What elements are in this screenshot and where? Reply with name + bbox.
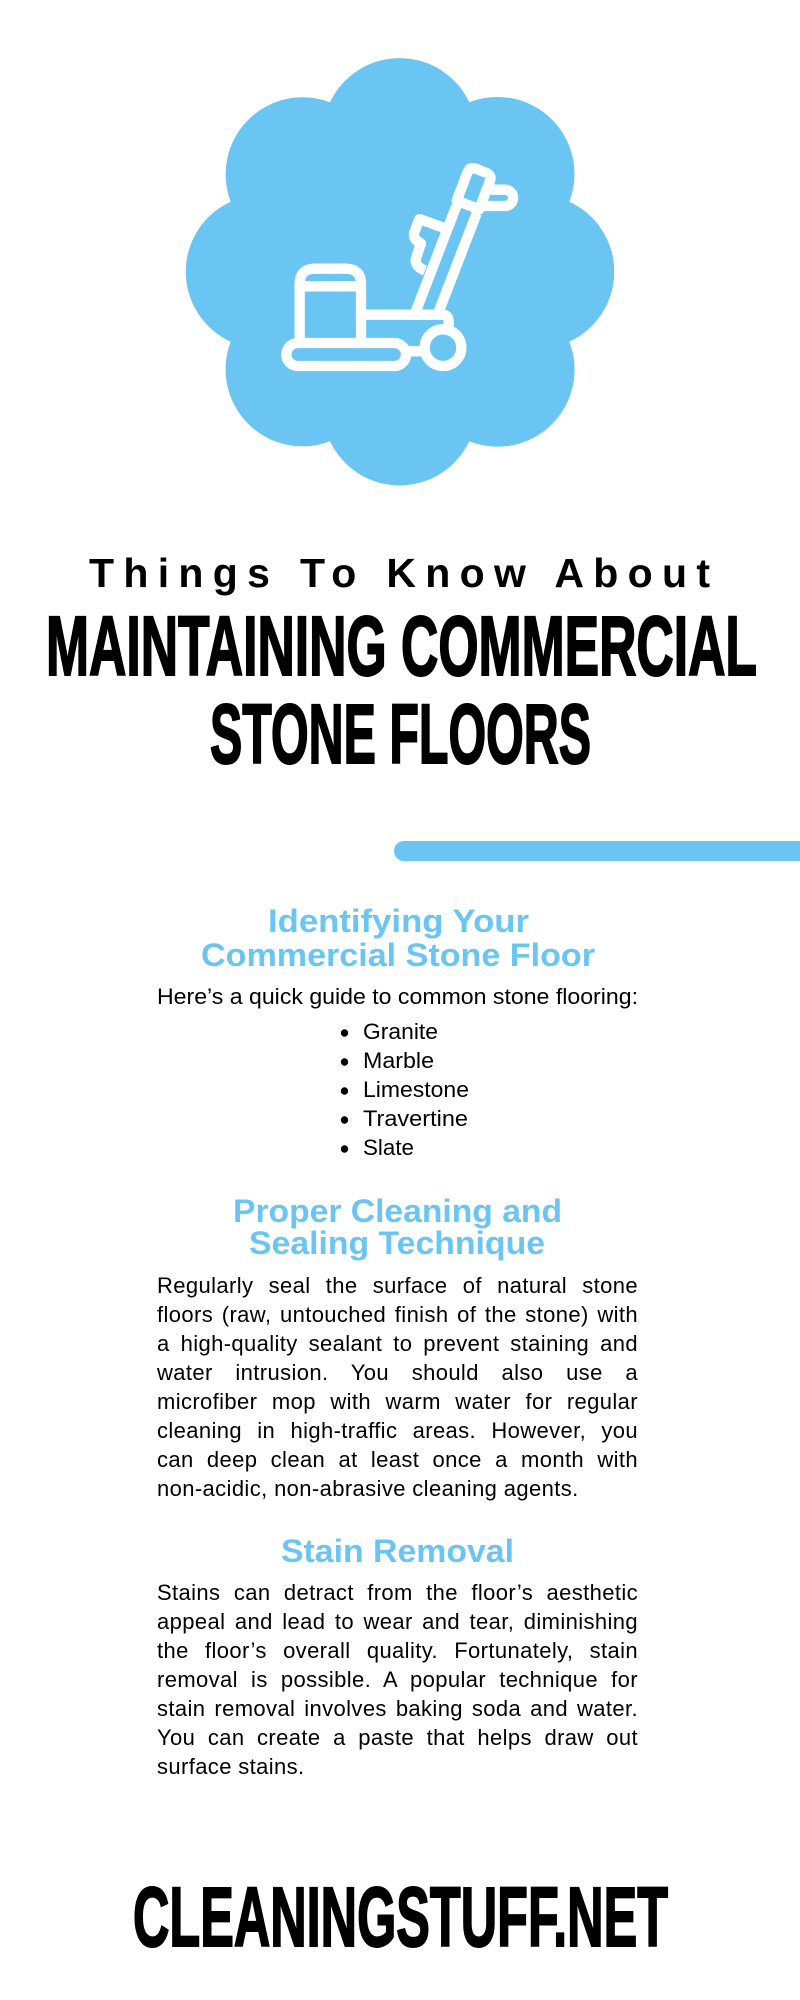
accent bar (394, 841, 800, 861)
heading: identifying your commercial stone floor (201, 903, 595, 973)
paragraph: cleaning and sealing: non-acidic, non-abrasive cleaning agents. (157, 1476, 579, 1501)
heading: proper cleaning and sealing technique: Sealing Technique (249, 1225, 545, 1261)
stone types list: Marble (363, 1048, 434, 1073)
paragraph: stain removal (157, 1580, 638, 1779)
heading: proper cleaning and sealing technique (233, 1193, 562, 1261)
paragraph: cleaning and sealing: water intrusion. You should also use a (157, 1360, 638, 1385)
paragraph: cleaning and sealing (157, 1273, 638, 1501)
paragraph: stain removal: You can create a paste that helps draw out (157, 1725, 638, 1750)
stone types list (341, 1019, 469, 1160)
paragraph: stain removal: surface stains. (157, 1754, 305, 1779)
scalloped blue badge (186, 58, 614, 485)
paragraph: stain removal: removal is possible. A popular technique for (157, 1667, 638, 1692)
heading: identifying your commercial stone floor: Commercial Stone Floor (201, 937, 595, 973)
paragraph: stain removal: the floor’s overall quality. Fortunately, stain (157, 1638, 638, 1663)
paragraph: stain removal: appeal and lead to wear and tear, diminishing (157, 1609, 638, 1634)
paragraph: cleaning and sealing: cleaning in high-traffic areas. However, you (157, 1418, 638, 1443)
paragraph: cleaning and sealing: microfiber mop with warm water for regular (157, 1389, 638, 1414)
heading: proper cleaning and sealing technique: Proper Cleaning and (233, 1193, 562, 1229)
heading: identifying your commercial stone floor: Identifying Your (268, 903, 529, 939)
stone types list: Limestone (363, 1077, 469, 1102)
paragraph: stain removal: stain removal involves baking soda and water. (157, 1696, 638, 1721)
paragraph: cleaning and sealing: can deep clean at least once a month with (157, 1447, 638, 1472)
paragraph: cleaning and sealing: floors (raw, untouched finish of the stone) with (157, 1302, 638, 1327)
stone types list: Travertine (363, 1106, 468, 1131)
paragraph: stain removal: Stains can detract from the floor’s aesthetic (157, 1580, 638, 1605)
stone types list: Slate (363, 1135, 414, 1160)
icon: floor scrubber machine on blue scalloped badge (186, 58, 614, 485)
floor machine line icon (286, 168, 513, 366)
intro sentence: Here’s a quick guide to common stone flooring: (157, 984, 638, 1009)
main title (46, 599, 757, 781)
paragraph: cleaning and sealing: a high-quality sealant to prevent staining and (157, 1331, 638, 1356)
paragraph: cleaning and sealing: Regularly seal the surface of natural stone (157, 1273, 638, 1298)
stone types list: Granite (363, 1019, 438, 1044)
heading: stain removal: Stain Removal (281, 1533, 514, 1569)
title kicker: Things To Know About (89, 550, 710, 596)
